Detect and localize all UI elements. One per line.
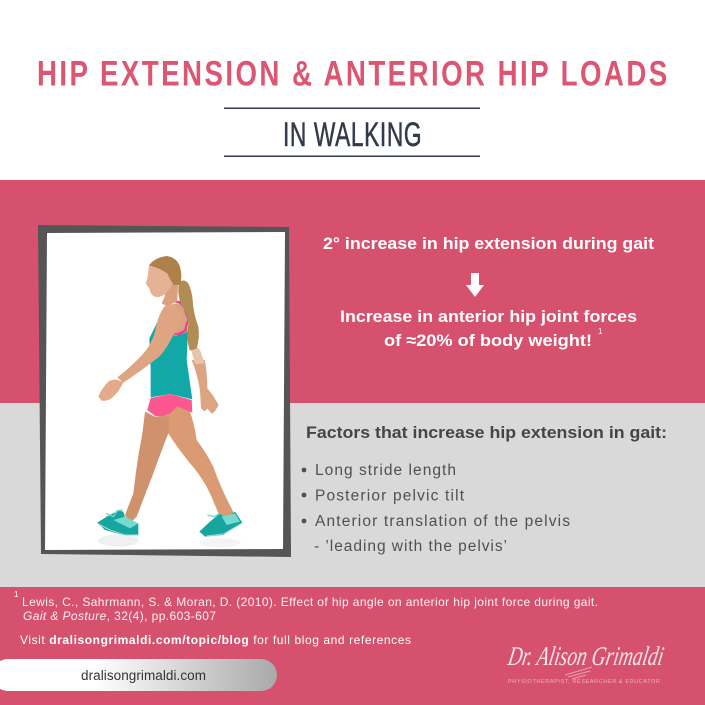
heading: factors: Factors that increase hip extension in gait: — [306, 424, 667, 442]
text: leading with the pelvis: - ’leading with the pelvis’ — [314, 538, 507, 555]
text block: footer references — [14, 590, 598, 647]
arrow: leads to — [466, 273, 484, 297]
heading: main title: HIP EXTENSION & ANTERIOR HIP LOADS — [37, 53, 667, 93]
tank top — [149, 320, 192, 399]
text block: factors — [302, 424, 667, 555]
back arm and hand — [192, 360, 219, 414]
panel: footer background — [0, 587, 705, 705]
front arm — [117, 305, 182, 383]
logo: signature: PHYSIOTHERAPIST, RESEARCHER & EDUCATOR — [508, 679, 660, 685]
reference line 2: Gait & Posture, 32(4), pp.603-607 — [23, 609, 216, 623]
shorts — [147, 394, 192, 417]
bullet: pelvic tilt: Posterior pelvic tilt — [315, 488, 465, 504]
text: body weight percentage: of ≈20% of body weight! — [384, 331, 592, 350]
front hand — [98, 380, 123, 401]
photo frame — [38, 225, 291, 557]
bullet: translation: Anterior translation of the pelvis — [315, 513, 570, 530]
website pill — [0, 659, 277, 691]
logo: signature — [505, 641, 666, 685]
rear shoe — [199, 512, 242, 537]
website pill: dralisongrimaldi.com — [81, 668, 206, 683]
hair — [149, 256, 181, 285]
upper back and strap — [167, 303, 188, 335]
neck — [162, 278, 178, 306]
reference line 1: Lewis, C., Sahrmann, S. & Moran, D. (2010). Effect of hip angle on anterior hip joint force during gait. — [22, 595, 598, 609]
front shoe — [97, 511, 138, 535]
heading: subtitle: IN WALKING — [283, 116, 422, 154]
face — [146, 263, 175, 297]
text: joint force increase: Increase in anterior hip joint forces — [340, 307, 637, 326]
back leg — [162, 407, 234, 518]
title — [37, 53, 667, 157]
text: hip extension increase: 2° increase in hip extension during gait — [323, 234, 654, 253]
citation marker: 1 — [598, 327, 603, 336]
text block: key finding — [323, 234, 654, 350]
panel: key finding background — [0, 180, 705, 403]
front leg — [125, 412, 169, 523]
bullet: stride length: Long stride length — [315, 462, 456, 479]
icon: walking woman — [97, 256, 242, 547]
citation number: 1 — [14, 590, 19, 599]
panel: factors background — [0, 403, 705, 587]
ponytail — [178, 280, 199, 351]
visit link: Visit dralisongrimaldi.com/topic/blog for full blog and references — [20, 633, 411, 647]
